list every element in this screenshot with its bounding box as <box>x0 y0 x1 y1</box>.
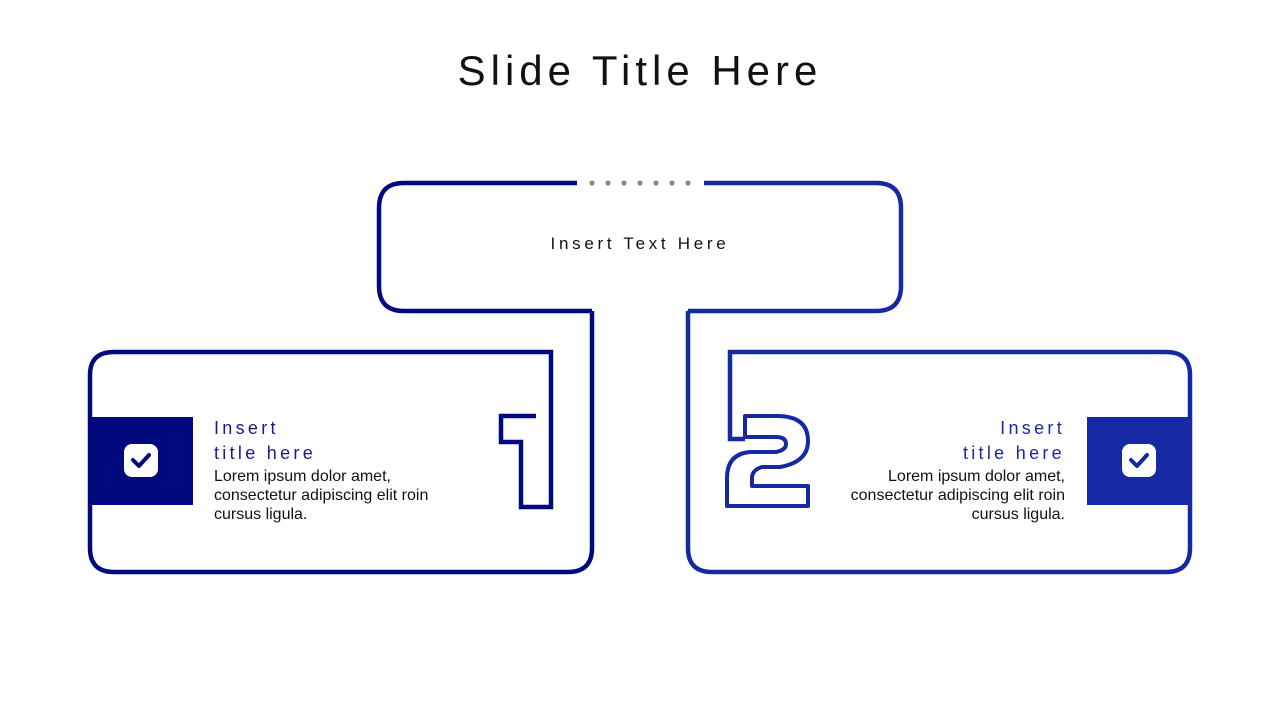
panel: left <box>90 311 592 572</box>
top box <box>379 180 901 311</box>
panel: right <box>688 311 1190 572</box>
top text: Insert Text Here <box>551 234 729 253</box>
number 2 <box>727 416 808 506</box>
left text: Lorem ipsum dolor amet, <box>214 468 391 485</box>
dots <box>589 180 691 186</box>
left text: Insert <box>214 418 279 438</box>
right text <box>851 418 1065 523</box>
right text: title here <box>963 443 1065 463</box>
right text: Insert <box>1000 418 1065 438</box>
right text: Lorem ipsum dolor amet, <box>888 468 1065 485</box>
icon block left <box>90 417 193 505</box>
left text: title here <box>214 443 316 463</box>
icon block right <box>1087 417 1190 505</box>
left text <box>214 418 428 523</box>
right text: cursus ligula. <box>972 506 1065 523</box>
right text: consectetur adipiscing elit roin <box>851 487 1065 504</box>
title: Slide Title Here <box>458 47 822 94</box>
left text: consectetur adipiscing elit roin <box>214 487 428 504</box>
left text: cursus ligula. <box>214 506 307 523</box>
